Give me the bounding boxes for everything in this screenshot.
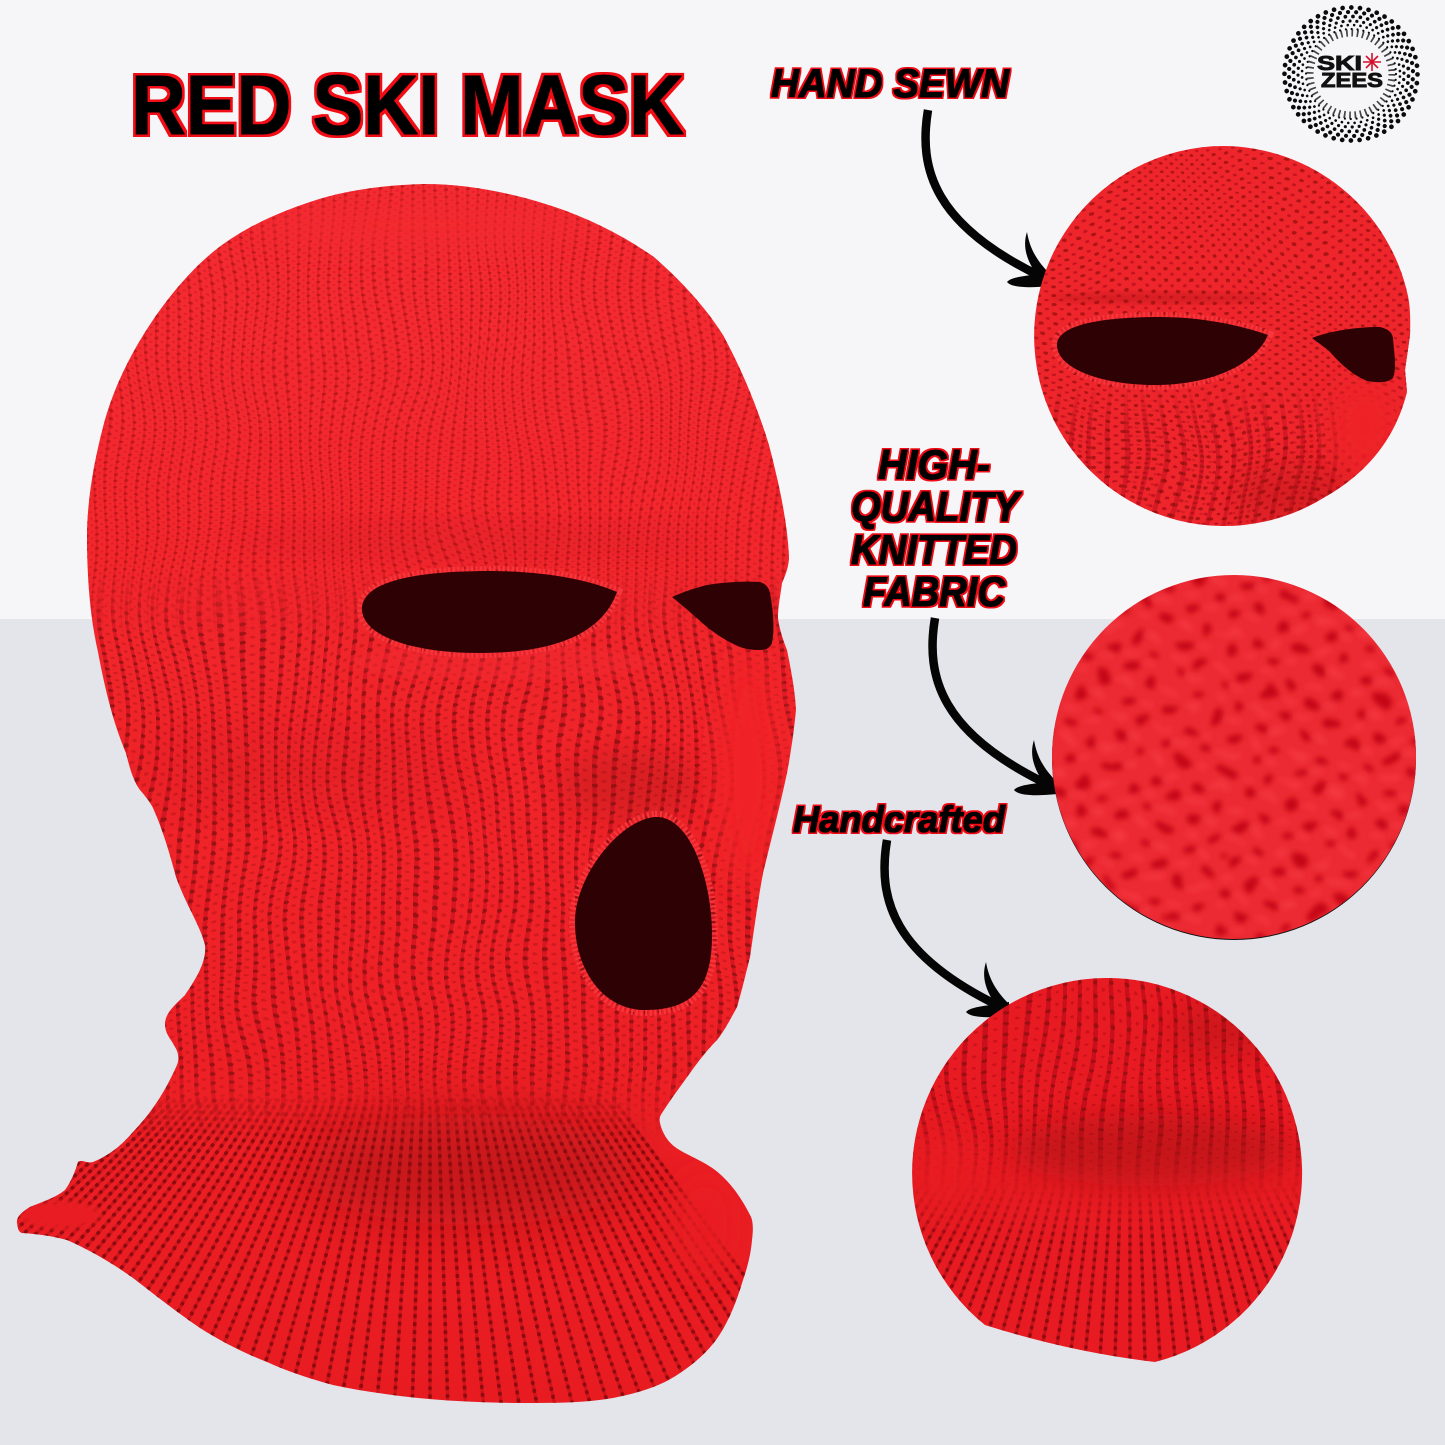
upper rib texture xyxy=(912,978,1300,1192)
label: high-quality knitted fabric: HIGH- xyxy=(878,441,990,488)
neck knit ribs xyxy=(17,1098,745,1403)
detail circle: eye openings xyxy=(1030,140,1415,532)
background: lower grey panel xyxy=(0,619,1445,1445)
face knit texture xyxy=(90,576,796,1134)
label: high-quality knitted fabric: KNITTED xyxy=(851,526,1017,573)
circle fill xyxy=(1030,140,1415,532)
neck shadow band xyxy=(1010,1114,1290,1186)
left eye hole xyxy=(362,571,617,653)
logo dot rings xyxy=(1270,0,1432,155)
lower fan rib texture xyxy=(914,1185,1302,1361)
mask shading xyxy=(20,201,778,1280)
main product: red three-hole ski mask xyxy=(16,184,796,1403)
detail left eye xyxy=(1057,317,1268,385)
head knit texture xyxy=(87,184,789,630)
title: RED SKI MASK xyxy=(131,58,684,152)
logo wordmark bottom: ZEES xyxy=(1321,70,1383,92)
label: high-quality knitted fabric xyxy=(851,441,1023,615)
label: high-quality knitted fabric: QUALITY xyxy=(851,483,1023,531)
sliver behind circle xyxy=(1405,330,1410,390)
detail circle: close-up fabric xyxy=(1052,575,1416,940)
label: high-quality knitted fabric: FABRIC xyxy=(863,568,1006,615)
mask knit body xyxy=(16,184,796,1403)
label: handcrafted: Handcrafted xyxy=(793,799,1006,840)
detail circle: neck ribbing xyxy=(912,978,1302,1362)
logo star xyxy=(1363,53,1381,71)
label: hand sewn: HAND SEWN xyxy=(771,62,1010,106)
lower rib texture xyxy=(1047,390,1338,526)
right eye hole xyxy=(672,582,773,650)
logo wordmark top: SKI xyxy=(1317,53,1362,75)
arrow: hand sewn to eye detail xyxy=(926,110,1050,287)
arrow: handcrafted to neck detail xyxy=(885,840,1009,1017)
logo centre disc xyxy=(1314,37,1388,111)
mouth hole xyxy=(575,817,712,1010)
logo: Ski Zees xyxy=(1270,0,1432,155)
detail right eye xyxy=(1312,327,1395,382)
background: upper light panel xyxy=(0,0,1445,620)
arrow: knitted fabric to fabric detail xyxy=(933,618,1057,795)
close-up knit xyxy=(1052,575,1416,939)
black edge xyxy=(1052,576,1416,940)
